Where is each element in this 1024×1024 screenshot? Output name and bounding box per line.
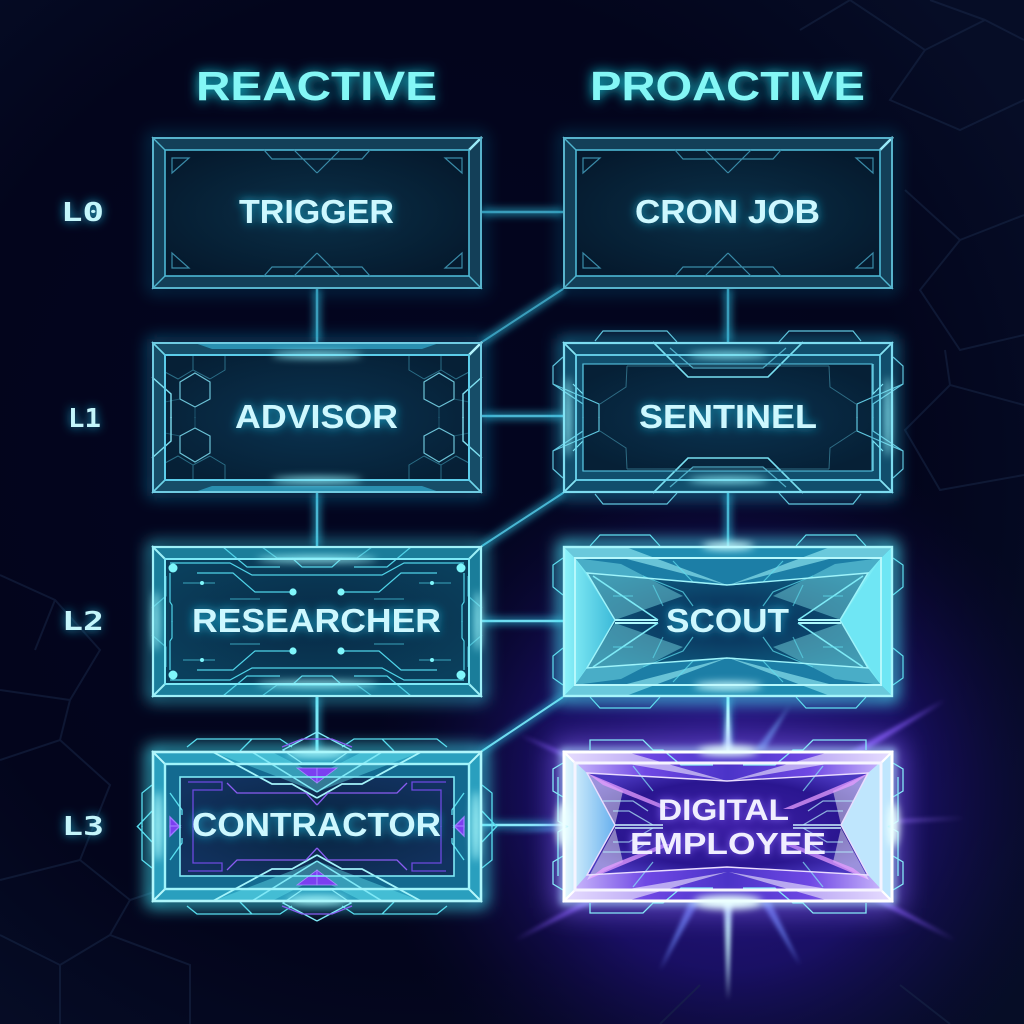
connector: cron job to sentinel: [727, 289, 729, 342]
label: cron job: CRON JOB: [635, 193, 820, 230]
connector: trigger to advisor: [316, 289, 318, 342]
panel: advisor: [152, 342, 482, 493]
bursts on panel edges: [557, 746, 899, 909]
connector: L0 horizontal: [482, 211, 563, 213]
column heading: reactive: REACTIVE: [196, 63, 437, 109]
edge highlights: [154, 749, 480, 904]
label: advisor: ADVISOR: [235, 398, 398, 435]
column heading: proactive: PROACTIVE: [590, 63, 865, 109]
panel: cron job: [563, 137, 893, 289]
label: contractor: CONTRACTOR: [192, 806, 441, 843]
label: digital employee: EMPLOYEE: [630, 826, 826, 861]
edge highlights: [153, 556, 481, 687]
connector: L1 horizontal: [482, 415, 563, 417]
connector: contractor to scout: [482, 697, 563, 751]
panel: scout: [553, 535, 903, 708]
connector: scout to digital employee: [726, 697, 730, 751]
level label L1: L1: [68, 404, 101, 434]
panel: researcher: [152, 546, 482, 697]
connector: advisor to cron job: [482, 289, 563, 342]
edge highlights: [272, 352, 362, 483]
label: trigger: TRIGGER: [239, 193, 394, 230]
connector: L3 horizontal: [482, 824, 563, 826]
starburst behind digital employee: [500, 700, 965, 1000]
panel: trigger: [152, 137, 482, 289]
label: digital employee: DIGITAL: [658, 794, 789, 827]
edge highlights: [565, 352, 891, 483]
level label L2: L2: [62, 607, 104, 637]
edge highlights: [694, 542, 762, 690]
connector: sentinel to scout: [727, 493, 729, 546]
panel: sentinel: [553, 331, 903, 504]
connectors glow: [317, 212, 728, 825]
panel: digital employee: [553, 740, 903, 913]
connector: researcher to sentinel: [482, 493, 563, 546]
label: scout: SCOUT: [666, 602, 789, 639]
connector: researcher to contractor: [316, 697, 318, 751]
level label L3: L3: [62, 812, 104, 842]
label: sentinel: SENTINEL: [639, 398, 817, 435]
level label L0: L0: [61, 198, 104, 228]
connector: L2 horizontal: [482, 620, 563, 622]
panel: contractor: [137, 732, 497, 921]
connector: advisor to researcher: [316, 493, 318, 546]
label: researcher: RESEARCHER: [192, 602, 441, 639]
label: digital employee: [630, 794, 826, 861]
